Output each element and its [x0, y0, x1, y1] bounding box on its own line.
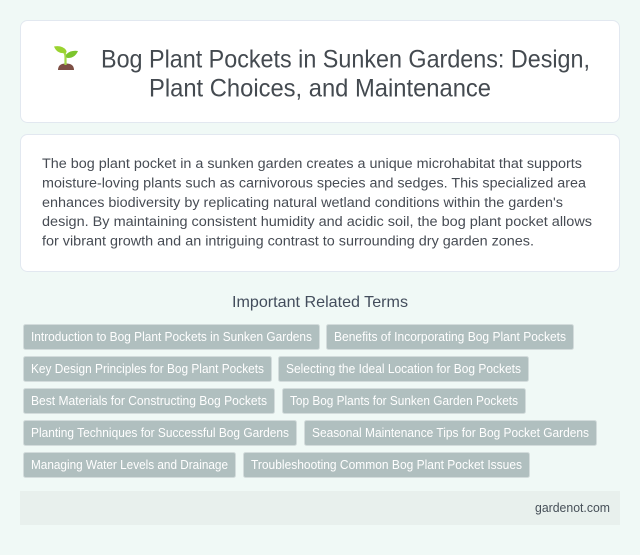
tag: Selecting the Ideal Location for Bog Pockets: [286, 362, 521, 376]
tag: Planting Techniques for Successful Bog Gardens: [31, 426, 289, 440]
tag: [24, 388, 274, 414]
tag: Seasonal Maintenance Tips for Bog Pocket Gardens: [312, 426, 589, 440]
tag: [24, 324, 320, 350]
text block: description: design. By maintaining consistent humidity and acidic soil, the bog plant pocket allows: [42, 214, 592, 230]
tag: Managing Water Levels and Drainage: [31, 458, 228, 472]
text block: description: enhances biodiversity by replicating natural wetland conditions within the garden's: [42, 195, 563, 211]
tag: Introduction to Bog Plant Pockets in Sunken Gardens: [31, 330, 312, 344]
title: Bog Plant Pockets in Sunken Gardens: Design,: [101, 46, 590, 74]
tag: [24, 420, 296, 446]
heading: important related terms: Important Related Terms: [232, 294, 408, 311]
tag: Best Materials for Constructing Bog Pockets: [31, 394, 267, 408]
text block: description: for vibrant growth and an intriguing contrast to surrounding dry garden zones.: [42, 234, 534, 250]
icon: seedling: [54, 46, 78, 70]
title: [101, 46, 590, 102]
panel: title card: [20, 20, 620, 122]
tag: [24, 452, 236, 478]
tag: [326, 324, 574, 350]
tag: [304, 420, 596, 446]
tag: Troubleshooting Common Bog Plant Pocket Issues: [251, 458, 522, 472]
text block: description: The bog plant pocket in a sunken garden creates a unique microhabitat that supports: [42, 156, 582, 172]
footer: [20, 491, 620, 525]
title: Plant Choices, and Maintenance: [149, 74, 491, 102]
tag: Key Design Principles for Bog Plant Pockets: [31, 362, 264, 376]
text block: description: [42, 156, 592, 250]
tag: Top Bog Plants for Sunken Garden Pockets: [290, 394, 518, 408]
tag list: [24, 324, 596, 478]
footer source text: gardenot.com: [535, 500, 610, 515]
tag: [278, 356, 528, 382]
tag: [244, 452, 530, 478]
text block: description: moisture-loving plants such as carnivorous species and sedges. This specialized area: [42, 175, 586, 191]
panel: description card: [20, 134, 620, 272]
tag: [24, 356, 272, 382]
tag: [282, 388, 526, 414]
tag: Benefits of Incorporating Bog Plant Pockets: [334, 330, 566, 344]
